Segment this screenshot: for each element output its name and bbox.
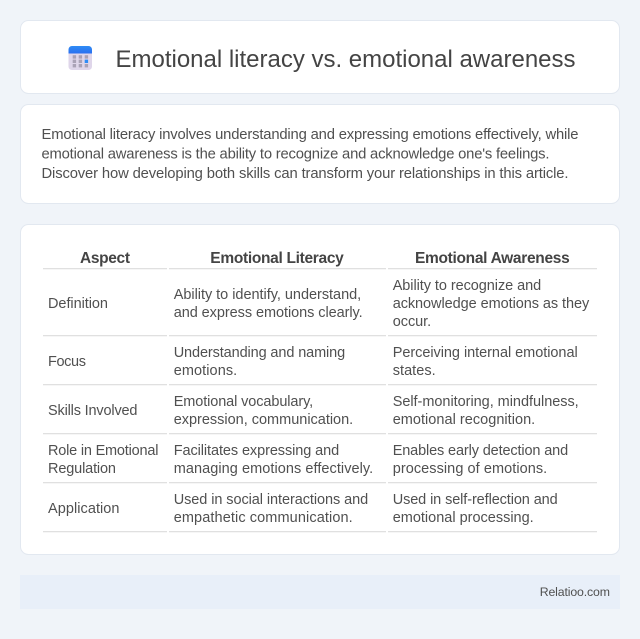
row: role in emotional regulation: Enables early detection and xyxy=(393,443,568,459)
row: definition: and express emotions clearly. xyxy=(174,305,363,321)
footer bar xyxy=(20,575,620,609)
row: skills involved xyxy=(48,394,579,428)
row: role in emotional regulation: processing of emotions. xyxy=(393,461,547,477)
row: application: Used in social interactions and xyxy=(174,492,368,508)
row: role in emotional regulation: Regulation xyxy=(48,461,116,477)
row: skills involved: Emotional vocabulary, xyxy=(174,394,313,410)
table header row: Emotional Literacy xyxy=(210,250,344,267)
row: role in emotional regulation: managing emotions effectively. xyxy=(174,461,373,477)
intro text: emotional awareness is the ability to recognize and acknowledge one's feelings. xyxy=(42,146,550,162)
table header row: Emotional Awareness xyxy=(415,250,570,267)
panel: header xyxy=(20,20,620,94)
row: application xyxy=(48,492,558,526)
table header row: Aspect xyxy=(80,250,130,267)
row: application: empathetic communication. xyxy=(174,510,353,526)
row: skills involved: Skills Involved xyxy=(48,403,138,419)
row: definition: Ability to identify, understand, xyxy=(174,287,361,303)
row: definition xyxy=(48,278,590,330)
row: application: Application xyxy=(48,501,120,517)
intro text xyxy=(42,127,578,182)
row: application: Used in self-reflection and xyxy=(393,492,558,508)
row: application: emotional processing. xyxy=(393,510,534,526)
row: focus: Focus xyxy=(48,354,86,370)
title: Emotional literacy vs. emotional awareness xyxy=(116,46,576,73)
intro text: Emotional literacy involves understanding and expressing emotions effectively, while xyxy=(42,127,578,143)
panel: introduction xyxy=(20,104,620,204)
row: definition: occur. xyxy=(393,314,431,330)
row: focus xyxy=(48,345,578,379)
row: definition: Definition xyxy=(48,296,108,312)
row: definition: acknowledge emotions as they xyxy=(393,296,590,312)
row: definition: Ability to recognize and xyxy=(393,278,541,294)
row: role in emotional regulation: Role in Emotional xyxy=(48,443,158,459)
footer text: Relatioo.com xyxy=(540,585,610,599)
row: focus: emotions. xyxy=(174,363,237,379)
icon: calendar xyxy=(68,46,92,70)
row: role in emotional regulation xyxy=(48,443,568,477)
row: skills involved: expression, communication. xyxy=(174,412,353,428)
row: focus: Perceiving internal emotional xyxy=(393,345,578,361)
row: role in emotional regulation: Facilitates expressing and xyxy=(174,443,339,459)
row: skills involved: emotional recognition. xyxy=(393,412,535,428)
table header row xyxy=(80,250,570,267)
intro text: Discover how developing both skills can transform your relationships in this article. xyxy=(42,166,568,182)
row: skills involved: Self-monitoring, mindfulness, xyxy=(393,394,579,410)
panel: comparison table xyxy=(20,224,620,554)
row: focus: Understanding and naming xyxy=(174,345,345,361)
row: focus: states. xyxy=(393,363,436,379)
